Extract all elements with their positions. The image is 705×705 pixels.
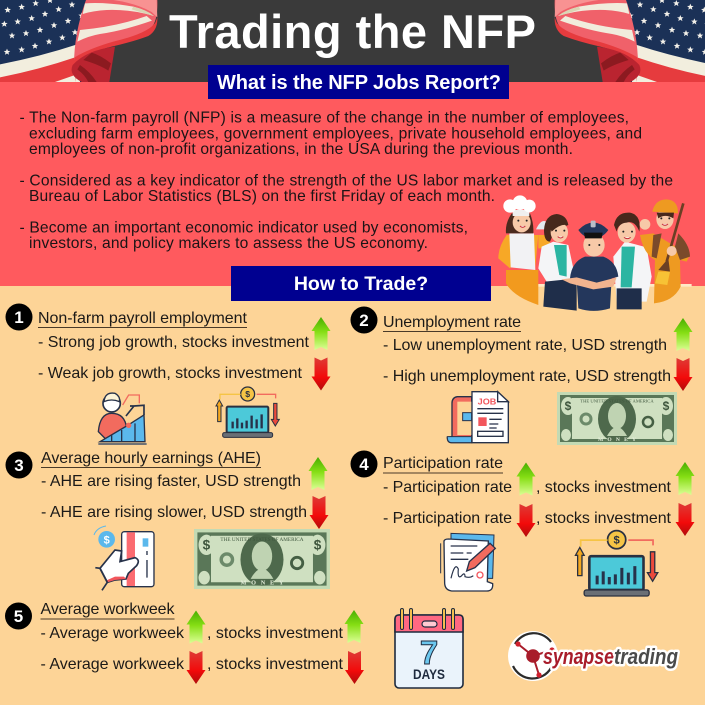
arrow: up [308, 457, 328, 490]
badge 5: 5 [14, 607, 23, 626]
section 4: participation rate [350, 450, 694, 596]
icon: job document: JOB [478, 397, 496, 407]
badge 1 [6, 304, 32, 330]
text: rising slower: - AHE are rising slower, USD strength [41, 504, 307, 521]
icon: dollar bill: THE UNITED STATES OF AMERICA [220, 537, 304, 543]
badge 3: 3 [14, 456, 24, 475]
badge 1: 1 [14, 308, 24, 327]
text block: key indicator [20, 172, 673, 205]
panel: what is the NFP [0, 65, 705, 286]
arrow: up [312, 317, 330, 350]
illustration: workers group [498, 195, 692, 311]
icon: laptop with stocks: $ [614, 535, 621, 547]
text block: economic indicator: investors, and policy makers to assess the US economy. [29, 235, 428, 252]
badge 4 [350, 450, 378, 478]
text: stocks investment: , stocks investment [207, 625, 344, 642]
logo: synapsetrading: synapse [543, 644, 614, 669]
badge 4: 4 [359, 455, 369, 474]
icon: job document [447, 392, 508, 443]
text: stocks investment: , stocks investment [536, 510, 672, 527]
badge 2: 2 [359, 311, 369, 330]
flag: right [555, 0, 705, 82]
section 2: unemployment rate [350, 306, 692, 445]
header band [100, 0, 620, 82]
icon: laptop with stocks [216, 387, 279, 437]
icon: dollar bill [557, 392, 677, 445]
text: stocks investment: , stocks investment [207, 656, 344, 673]
text: high unemployment: - High unemployment rate, USD strength [383, 368, 671, 385]
text block: economic indicator: - Become an important economic indicator used by economists, [20, 220, 468, 236]
section 1: non-farm payroll employment [6, 304, 330, 444]
text: strong job growth: - Strong job growth, stocks investment [38, 334, 310, 351]
text: low unemployment: - Low unemployment rate, USD strength [383, 337, 667, 354]
text: weak job growth: - Weak job growth, stocks investment [38, 365, 303, 382]
heading: how to trade [231, 266, 491, 301]
section 3: average hourly earnings [6, 450, 330, 590]
text: workweek up: - Average workweek [40, 625, 185, 642]
heading: Non-farm payroll employment [38, 310, 248, 327]
text block: key indicator: - Considered as a key indicator of the strength of the US labor market and is released by the [20, 172, 673, 190]
arrow: down [676, 503, 694, 536]
logo: synapsetrading: trading [614, 644, 678, 669]
icon: 7 days calendar: DAYS [413, 667, 445, 682]
text: participation down: - Participation rate [383, 510, 512, 527]
icon: dollar bill: $ [663, 399, 670, 413]
arrow: up [344, 610, 364, 643]
icon: hand with credit card [94, 526, 154, 590]
arrow: down [345, 651, 364, 684]
arrow: up [516, 462, 536, 496]
text block: NFP definition [20, 110, 642, 158]
text: stocks investment: , stocks investment [536, 479, 672, 496]
icon: dollar bill: $ [314, 537, 322, 552]
text: workweek down: - Average workweek [40, 656, 185, 673]
section 5: average workweek [5, 601, 678, 688]
heading: Average hourly earnings (AHE) [41, 450, 261, 467]
arrow: up [186, 610, 206, 644]
arrow: down [310, 496, 328, 529]
heading: what is the NFP jobs report: What is the NFP Jobs Report? [217, 72, 501, 94]
icon: signed document [441, 533, 495, 591]
icon: dollar bill: $ [203, 537, 211, 552]
arrow: down [674, 358, 692, 391]
logo: synapsetrading [508, 631, 678, 681]
arrow: down [186, 651, 206, 684]
icon: hand with credit card: $ [104, 534, 110, 546]
badge 5 [5, 602, 32, 630]
text block: economic indicator [20, 220, 468, 252]
text block: NFP definition: - The Non-farm payroll (NFP) is a measure of the change in the number of employees, [20, 110, 629, 126]
text block: NFP definition: excluding farm employees, government employees, private household employees, and [29, 126, 642, 142]
icon: laptop with stocks [575, 531, 658, 596]
badge 3 [6, 452, 32, 478]
heading: how to trade: How to Trade? [294, 273, 428, 295]
icon: dollar bill [194, 529, 330, 589]
text block: NFP definition: employees of non-profit organizations, in the USA during the previous month. [29, 141, 573, 158]
icon: dollar bill: MONEY [598, 437, 636, 443]
arrow: up [676, 462, 694, 495]
badge 2 [350, 306, 378, 334]
arrow: down [516, 504, 536, 537]
arrow: up [674, 318, 692, 351]
heading: what is the NFP jobs report [208, 65, 509, 99]
heading: Participation rate [383, 455, 503, 472]
icon: person with growth chart [98, 393, 147, 444]
title: Trading the NFP [169, 5, 536, 58]
icon: 7 days calendar: 7 [420, 634, 438, 671]
icon: dollar bill: THE UNITED STATES OF AMERICA [580, 398, 654, 404]
heading: Average workweek [40, 601, 176, 618]
flag: left [0, 0, 157, 82]
icon: laptop with stocks: $ [245, 389, 250, 399]
icon: dollar bill: MONEY [240, 580, 284, 587]
arrow: down [312, 358, 330, 390]
text: rising faster: - AHE are rising faster, USD strength [41, 473, 301, 490]
text block: key indicator: Bureau of Labor Statistics (BLS) on the first Friday of each month. [29, 188, 495, 205]
icon: 7 days calendar [395, 610, 463, 688]
heading: Unemployment rate [383, 314, 521, 331]
text: participation up: - Participation rate [383, 479, 512, 496]
icon: dollar bill: $ [565, 399, 572, 413]
